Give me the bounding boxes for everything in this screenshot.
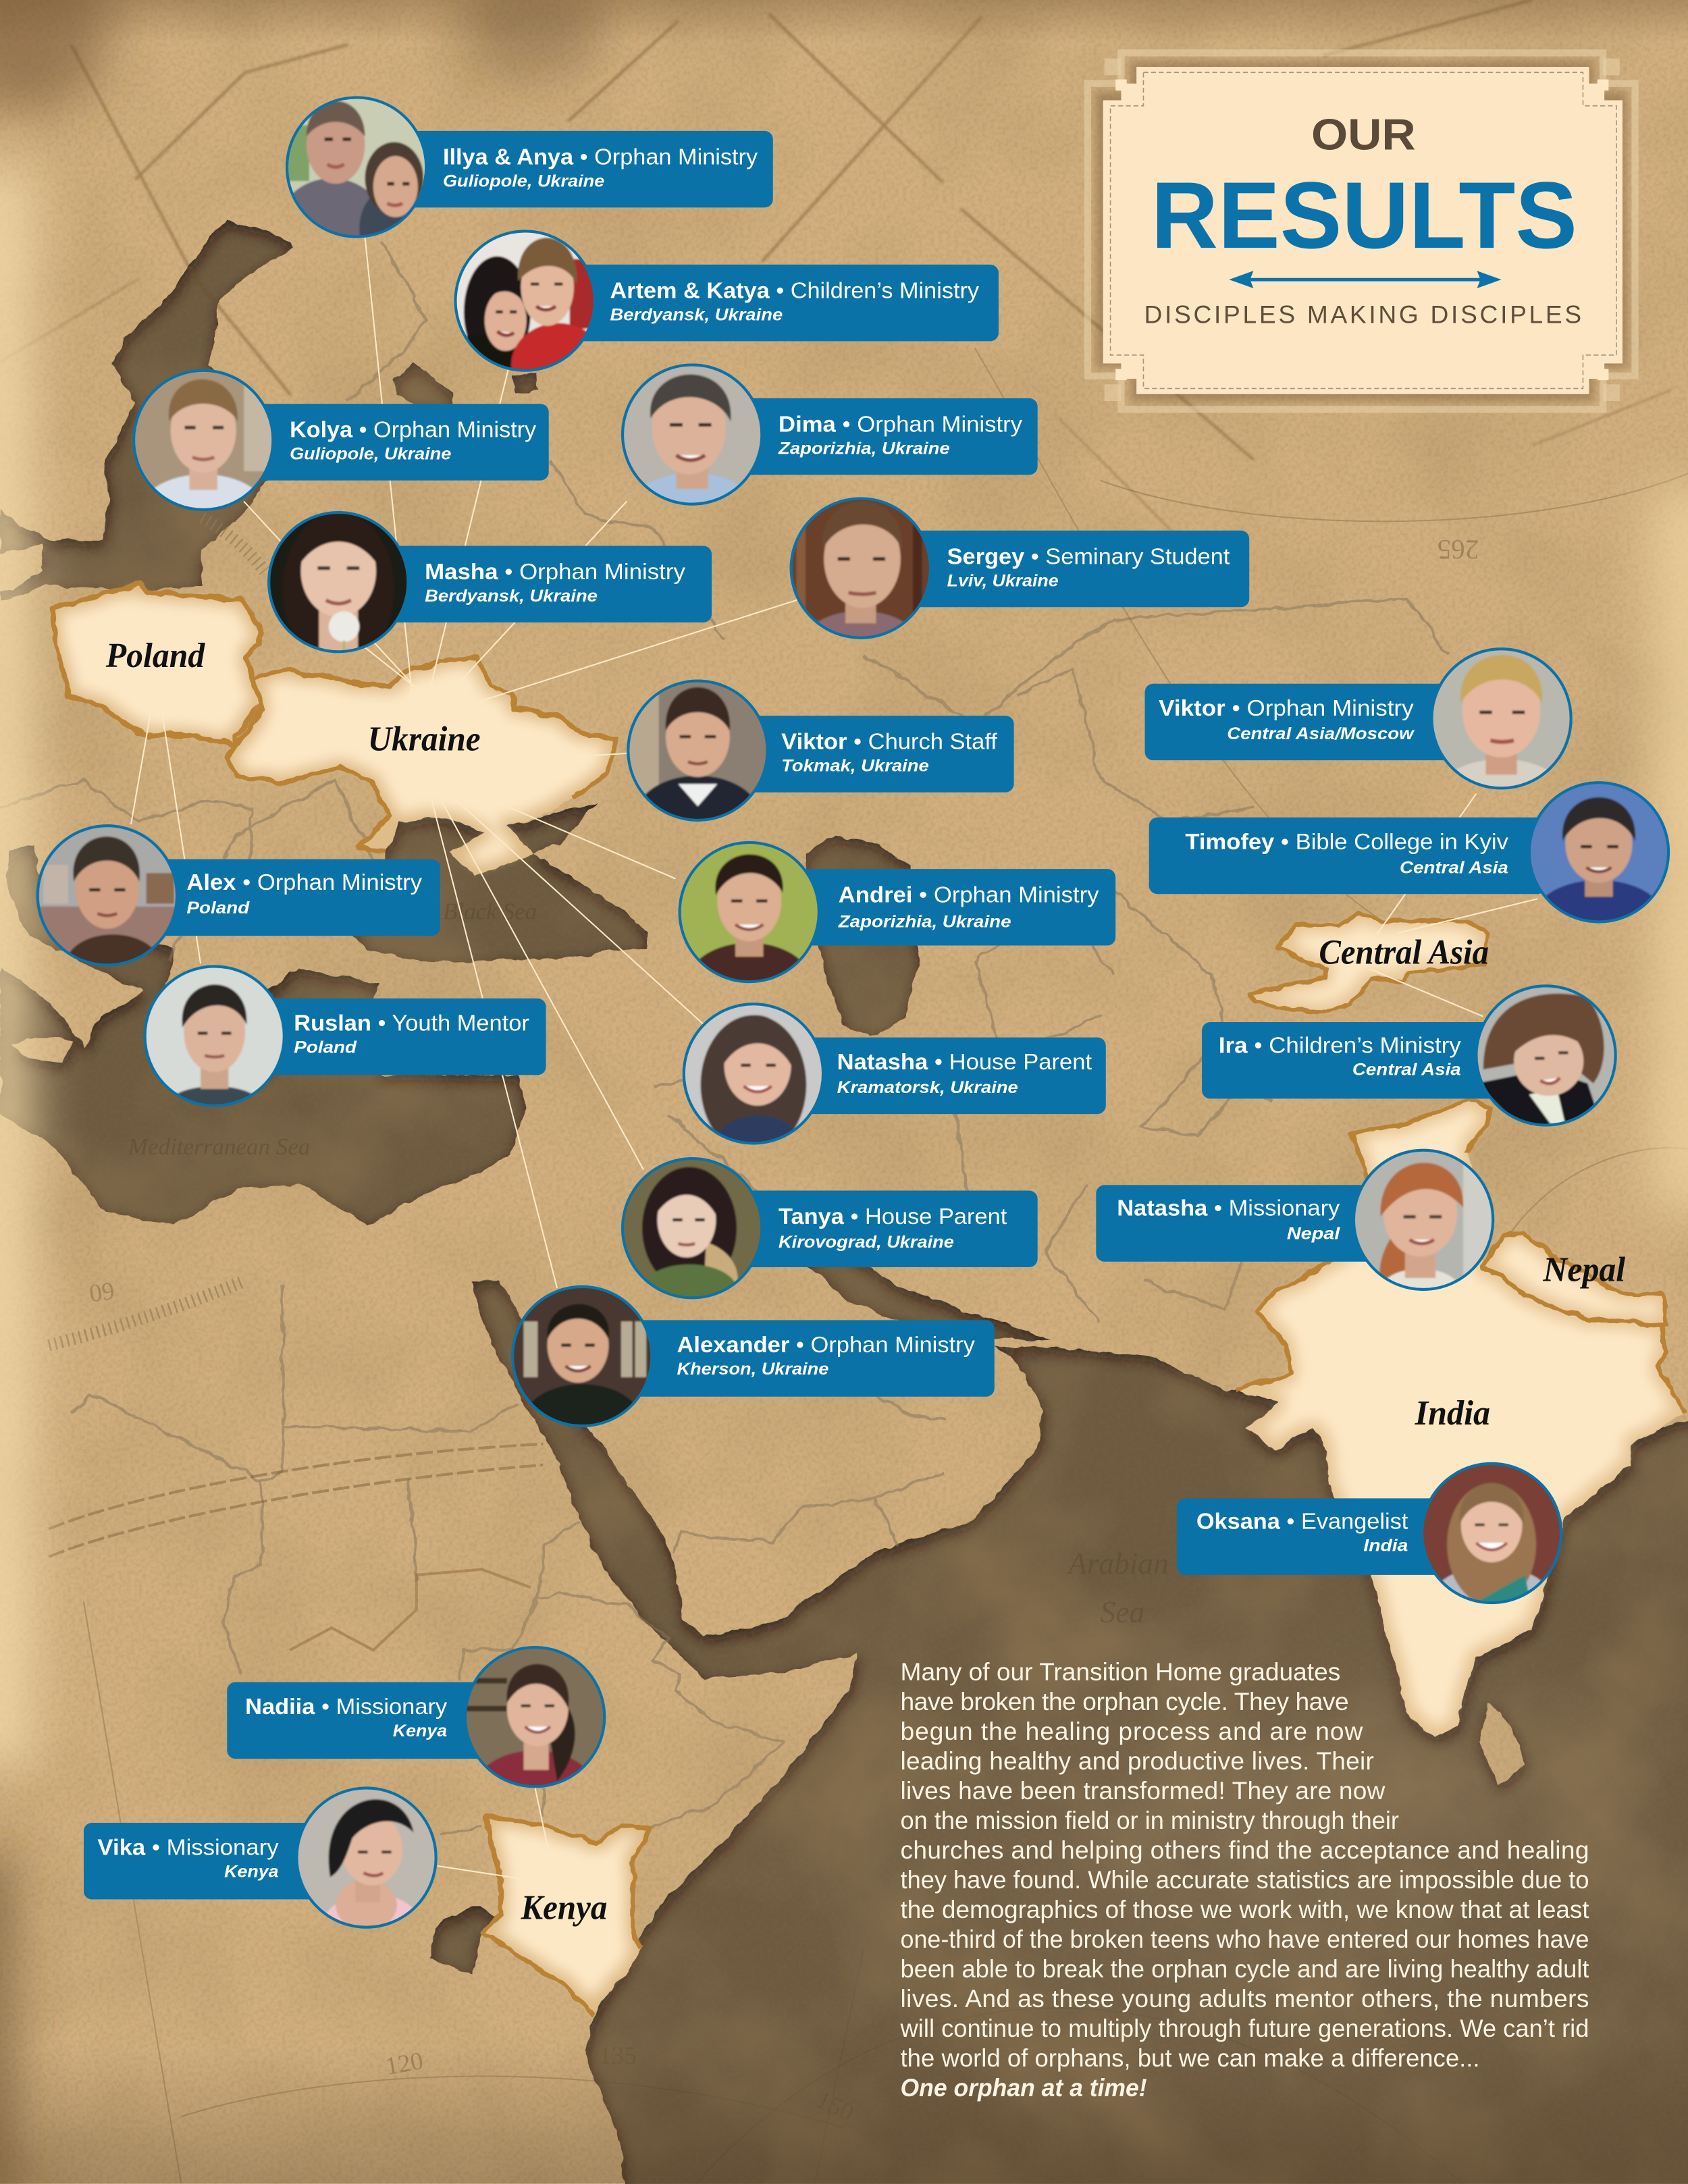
highlighted country: Nepal: Nepal — [1542, 1251, 1626, 1289]
label: Natasha • House Parent — [837, 1049, 1092, 1074]
person: Nadiia — [227, 1647, 604, 1823]
person: Natasha, House Parent — [684, 1004, 1106, 1171]
label: Viktor • Church Staff — [781, 729, 998, 754]
person: Sergey — [784, 491, 1249, 678]
highlighted country: Central Asia: Central Asia — [1319, 933, 1489, 971]
label — [250, 404, 549, 481]
label — [153, 859, 440, 936]
portrait — [38, 826, 177, 996]
label — [84, 1823, 334, 1899]
person: Viktor, Church Staff — [628, 681, 1014, 853]
portrait — [680, 843, 819, 1021]
map: faint chart lines, river and degree numbers: 09 — [88, 1277, 116, 1308]
person: Viktor, Orphan Ministry — [1145, 641, 1579, 834]
double arrow — [1229, 271, 1502, 288]
label: Timofey • Bible College in Kyiv — [1185, 829, 1508, 854]
body text block: churches and helping others find the acceptance and healing — [901, 1836, 1589, 1864]
portrait — [1347, 1143, 1500, 1312]
label — [571, 265, 999, 341]
label: Central Asia/Moscow — [1227, 725, 1415, 743]
person: Illya and Anya — [279, 97, 773, 273]
label — [794, 869, 1115, 946]
title panel — [1088, 53, 1635, 409]
map: grey borders — [0, 241, 1448, 1837]
label — [1149, 818, 1546, 894]
label — [390, 546, 712, 622]
map: faint chart lines, river and degree numbers: 265 — [1438, 534, 1479, 565]
body text block: have broken the orphan cycle. They have — [901, 1687, 1349, 1715]
map: creases and worn marks — [0, 0, 1671, 585]
label — [1177, 1498, 1462, 1575]
label — [738, 398, 1038, 475]
label: Kenya — [393, 1722, 447, 1740]
sea names: Sea — [1101, 1595, 1144, 1629]
highlighted country: India: India — [1415, 1394, 1490, 1433]
label: Zaporizhia, Ukraine — [838, 913, 1011, 932]
sea names: Arabian — [1066, 1547, 1169, 1580]
label: Ira • Children’s Ministry — [1219, 1032, 1461, 1057]
label: Vika • Missionary — [97, 1834, 279, 1859]
label: Berdyansk, Ukraine — [425, 587, 598, 606]
label: Alex • Orphan Ministry — [186, 870, 423, 895]
person: Ira — [1202, 986, 1616, 1125]
label: Dima • Orphan Ministry — [779, 411, 1023, 436]
label: Sergey • Seminary Student — [947, 543, 1230, 568]
dashed inner border — [1111, 72, 1616, 388]
person: Oksana — [1177, 1464, 1561, 1628]
label: Nepal — [1287, 1225, 1341, 1244]
label: Guliopole, Ukraine — [443, 172, 604, 190]
highlighted country: Central Asia — [1250, 913, 1489, 1013]
person: Andrei — [680, 843, 1115, 1021]
sea names — [128, 898, 1169, 1629]
portrait — [145, 966, 284, 1125]
highlighted country: Ukraine — [226, 658, 616, 876]
portrait — [269, 512, 408, 666]
portrait — [126, 362, 282, 556]
person: Artem and Katya — [456, 231, 999, 406]
label: Poland — [186, 899, 250, 917]
connector lines from people to countries — [131, 237, 1537, 1880]
highlighted country: Poland: Poland — [105, 637, 205, 675]
person: Alexander — [512, 1287, 995, 1456]
body text block: will continue to multiply through future generations. We can’t rid — [900, 2014, 1589, 2042]
label: Oksana • Evangelist — [1196, 1509, 1408, 1534]
body text block — [900, 1657, 1589, 2102]
panel frame — [1088, 53, 1635, 409]
person: Tanya — [623, 1158, 1038, 1314]
label — [745, 716, 1014, 793]
label: Kherson, Ukraine — [677, 1360, 829, 1379]
person: Natasha, Missionary — [1096, 1143, 1500, 1312]
label: Poland — [294, 1038, 357, 1057]
portrait — [465, 1647, 604, 1823]
label — [258, 998, 546, 1075]
label — [227, 1682, 502, 1759]
portrait — [456, 231, 606, 406]
portrait — [286, 96, 425, 238]
body text block: lives have been transformed! They are now — [901, 1776, 1386, 1805]
body text block: One orphan at a time! — [901, 2073, 1147, 2102]
label — [627, 1320, 995, 1397]
label — [801, 1038, 1106, 1114]
label — [1145, 684, 1462, 760]
sea names: Black Sea — [443, 898, 537, 924]
body text block: one-third of the broken teens who have entered our homes have — [901, 1925, 1589, 1953]
body text block: on the mission field or in ministry through their — [901, 1806, 1399, 1834]
body text block: they have found. While accurate statistics are impossible due to — [901, 1865, 1589, 1894]
map: faint chart lines, river and degree numbers: 120 — [384, 2047, 425, 2081]
label: Tokmak, Ukraine — [781, 757, 929, 776]
person: Timofey — [1149, 782, 1668, 953]
portrait — [1422, 1464, 1561, 1628]
label: Berdyansk, Ukraine — [610, 306, 783, 324]
highlighted country: Ukraine: Ukraine — [368, 720, 481, 759]
portrait — [512, 1287, 652, 1456]
label — [1202, 1022, 1504, 1098]
label: Kramatorsk, Ukraine — [837, 1079, 1018, 1097]
label: Masha • Orphan Ministry — [425, 559, 685, 584]
label: Andrei • Orphan Ministry — [839, 882, 1099, 907]
label: Central Asia — [1400, 859, 1508, 877]
portrait — [1529, 782, 1668, 953]
person: Ruslan — [145, 966, 546, 1125]
tagline: DISCIPLES MAKING DISCIPLES — [1144, 300, 1581, 329]
label — [738, 1191, 1038, 1267]
portrait — [628, 681, 768, 853]
label — [1096, 1185, 1393, 1262]
heading: OUR: OUR — [1311, 110, 1416, 159]
person: Vika — [84, 1788, 436, 1961]
label: Central Asia — [1352, 1061, 1461, 1079]
panel body — [1103, 67, 1623, 394]
body text block: the demographics of those we work with, we know that at least — [901, 1895, 1589, 1923]
label: Alexander • Orphan Ministry — [677, 1332, 975, 1357]
label: Natasha • Missionary — [1117, 1196, 1340, 1221]
portrait — [784, 491, 937, 678]
portrait — [1423, 641, 1579, 834]
person: Kolya — [126, 362, 549, 556]
label: Zaporizhia, Ukraine — [778, 440, 950, 458]
highlighted country: Poland — [51, 583, 263, 748]
label: Tanya • House Parent — [779, 1204, 1007, 1229]
highlighted country: Kenya — [482, 1817, 648, 2015]
body text block: the world of orphans, but we can make a difference... — [901, 2044, 1480, 2072]
label: Ruslan • Youth Mentor — [294, 1010, 529, 1035]
portrait — [296, 1788, 436, 1961]
highlighted country: Nepal — [1483, 1232, 1666, 1325]
portrait — [1476, 986, 1616, 1125]
portrait — [623, 1158, 762, 1314]
label — [404, 131, 773, 207]
label: Kirovograd, Ukraine — [779, 1233, 954, 1252]
label: Guliopole, Ukraine — [290, 446, 452, 464]
label: Lviv, Ukraine — [947, 572, 1059, 590]
label: Kenya — [224, 1863, 279, 1881]
body text block: lives. And as these young adults mentor others, the numbers — [901, 1984, 1589, 2013]
label: Nadiia • Missionary — [245, 1694, 448, 1719]
map: faint chart lines, river and degree numbers: 135 — [599, 2042, 637, 2070]
portrait — [684, 1004, 823, 1171]
person: Masha — [269, 512, 712, 666]
label: India — [1363, 1537, 1408, 1555]
person: Dima — [612, 354, 1038, 556]
portrait — [612, 354, 772, 556]
body text block: leading healthy and productive lives. Their — [901, 1747, 1374, 1775]
sea names: Mediterranean Sea — [128, 1134, 310, 1160]
body text block: begun the healing process and are now — [901, 1717, 1363, 1745]
label: Kolya • Orphan Ministry — [290, 417, 537, 442]
body text block: Many of our Transition Home graduates — [901, 1657, 1340, 1686]
label: Viktor • Orphan Ministry — [1159, 695, 1414, 720]
body text block: been able to break the orphan cycle and are living healthy adult — [901, 1954, 1589, 1983]
person: Alex — [38, 826, 440, 996]
label — [905, 531, 1249, 607]
label: Illya & Anya • Orphan Ministry — [443, 144, 758, 169]
highlighted country: India — [1236, 1100, 1685, 1738]
map: faint chart lines, river and degree numbers: 150 — [812, 2086, 858, 2127]
label: Artem & Katya • Children’s Ministry — [610, 277, 980, 302]
heading: RESULTS: RESULTS — [1151, 162, 1577, 268]
highlighted country: Kenya: Kenya — [521, 1888, 607, 1927]
